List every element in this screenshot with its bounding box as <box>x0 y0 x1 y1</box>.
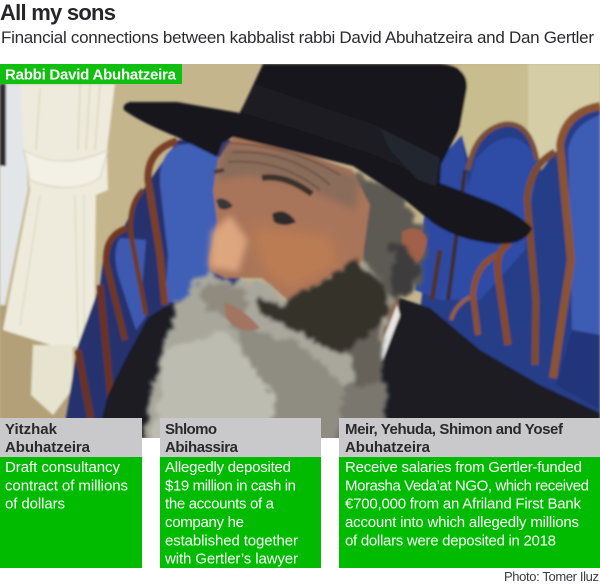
wall: right side <box>458 68 526 158</box>
photo: Rabbi David Abuhatzeira <box>0 64 600 445</box>
collar <box>378 304 402 362</box>
window frame <box>0 84 6 166</box>
card: Yitzhak Abuhatzeira: contract of millions <box>5 477 128 494</box>
card: Yitzhak Abuhatzeira: of dollars <box>5 496 65 513</box>
neck <box>379 298 402 341</box>
hat <box>124 64 532 244</box>
left chairs <box>62 140 240 438</box>
card: Yitzhak Abuhatzeira: Yitzhak <box>5 421 58 438</box>
curtain <box>3 84 115 415</box>
name tag: Rabbi David Abuhatzeira <box>5 66 177 84</box>
card: Shlomo Abihassira: Shlomo <box>165 421 217 438</box>
card: Meir, Yehuda, Shimon and Yosef Abuhatzeira: account into which allegedly millions <box>345 514 579 531</box>
title: All my sons <box>0 0 116 25</box>
card: Yitzhak Abuhatzeira <box>0 418 142 568</box>
jacket <box>97 298 600 438</box>
ear <box>402 228 427 266</box>
card: Shlomo Abihassira: Abihassira <box>165 439 239 456</box>
hair at side <box>345 172 425 302</box>
card: Shlomo Abihassira: the accounts of a <box>165 496 275 513</box>
lips <box>224 303 260 330</box>
card: Meir, Yehuda, Shimon and Yosef Abuhatzeira: €700,000 from an Afriland First Bank <box>345 496 582 513</box>
card: Meir, Yehuda, Shimon and Yosef Abuhatzeira <box>339 418 600 568</box>
card: Yitzhak Abuhatzeira: Abuhatzeira <box>5 439 91 456</box>
wall: far right panel <box>528 64 600 170</box>
card: Shlomo Abihassira: $19 million in cash in <box>165 477 296 494</box>
subtitle: Financial connections between kabbalist rabbi David Abuhatzeira and Dan Gertler <box>1 28 594 47</box>
card: Shlomo Abihassira: with Gertler’s lawyer <box>164 551 298 568</box>
card: Meir, Yehuda, Shimon and Yosef Abuhatzeira: of dollars were deposited in 2018 <box>345 532 556 549</box>
card: Shlomo Abihassira: company he <box>165 514 244 531</box>
card: Yitzhak Abuhatzeira: Draft consultancy <box>5 459 120 476</box>
card: Shlomo Abihassira: established together <box>165 532 298 549</box>
card: Meir, Yehuda, Shimon and Yosef Abuhatzeira: Meir, Yehuda, Shimon and Yosef <box>345 421 564 438</box>
card: Shlomo Abihassira: Allegedly deposited <box>165 459 291 476</box>
card: Meir, Yehuda, Shimon and Yosef Abuhatzeira: Receive salaries from Gertler-funded <box>345 459 582 476</box>
right chairs <box>415 106 600 420</box>
photo credit: Photo: Tomer Iluz <box>504 569 599 584</box>
facial features: brows and eyes <box>214 143 340 225</box>
sidelock <box>388 240 420 298</box>
window strip <box>0 84 28 305</box>
card: Meir, Yehuda, Shimon and Yosef Abuhatzeira: Morasha Veda’at NGO, which received <box>345 477 589 494</box>
card: Meir, Yehuda, Shimon and Yosef Abuhatzeira: Abuhatzeira <box>345 439 431 456</box>
beard <box>142 262 400 445</box>
face <box>209 137 370 302</box>
card: Shlomo Abihassira <box>160 418 321 568</box>
wall: lower left <box>0 305 70 438</box>
